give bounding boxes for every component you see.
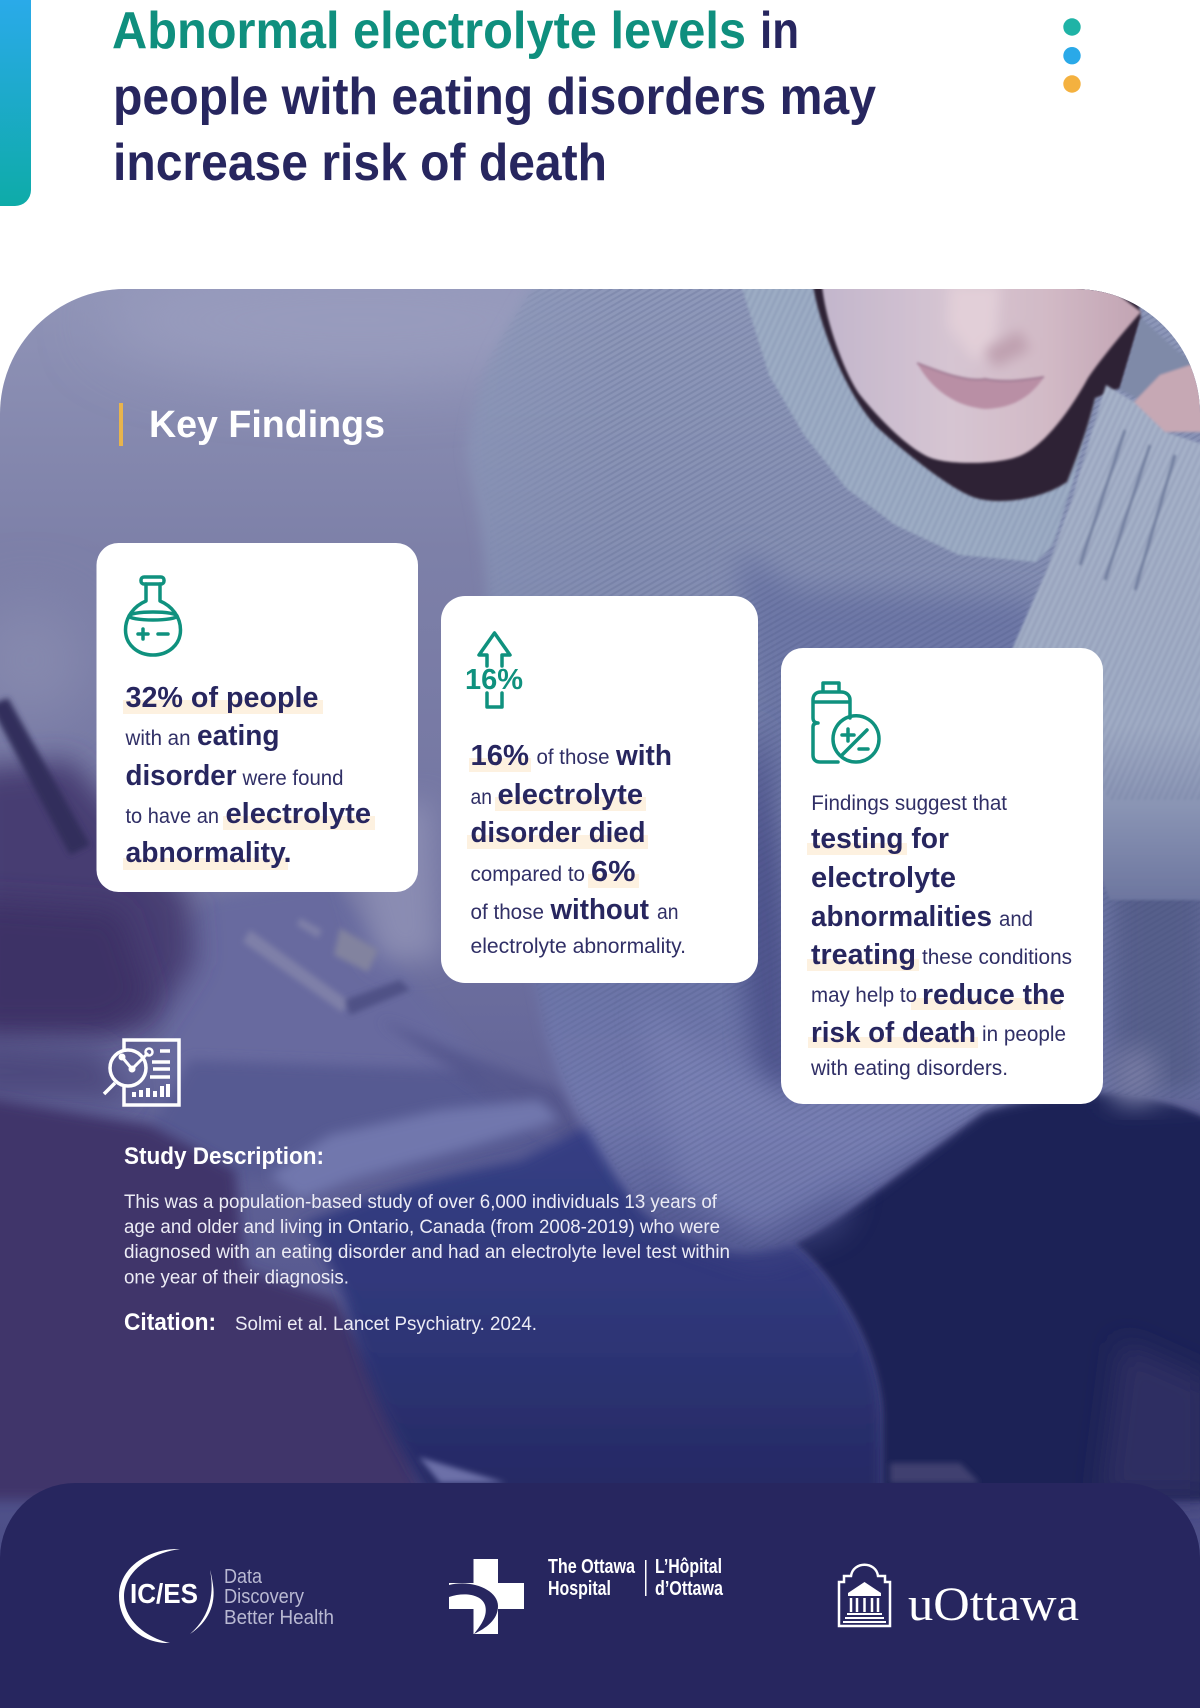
title: Abnormal electrolyte levels — [112, 2, 746, 60]
dark inner collar — [813, 285, 1141, 501]
logo: The Ottawa Hospital: d’Ottawa — [655, 1578, 724, 1600]
logo: IC/ES: Discovery — [224, 1586, 304, 1608]
text: recommendation: abnormalities — [811, 901, 992, 933]
text: citation: Solmi et al. Lancet Psychiatry. 2024. — [235, 1314, 537, 1335]
decorative three dots — [1063, 18, 1081, 93]
collar ribbing — [742, 289, 1092, 562]
face — [822, 285, 1141, 463]
logo: The Ottawa Hospital: The Ottawa — [548, 1556, 636, 1578]
title — [112, 2, 876, 192]
logo: The Ottawa Hospital: Hospital — [548, 1578, 611, 1600]
text: recommendation: with eating disorders. — [810, 1057, 1008, 1080]
logo: IC/ES: Better Health — [224, 1607, 334, 1629]
text: 32% finding — [123, 682, 375, 870]
title: in — [760, 2, 799, 60]
panel: card 32% of people — [96, 543, 418, 892]
text: mortality comparison: compared to — [470, 863, 585, 886]
text: recommendation: and — [999, 908, 1033, 931]
text: mortality comparison: electrolyte abnormality. — [470, 935, 686, 958]
title: increase risk of death — [113, 134, 607, 192]
pen — [0, 698, 90, 855]
logo: The Ottawa Hospital: L’Hôpital — [655, 1556, 722, 1578]
logo: uOttawa: uOttawa — [908, 1578, 1079, 1631]
text: recommendation: electrolyte — [811, 862, 956, 894]
logo: IC/ES: IC/ES — [130, 1578, 198, 1609]
text: recommendation: testing for — [811, 823, 949, 855]
text: 32% finding: with an — [125, 727, 190, 750]
logo: uOttawa — [839, 1565, 1079, 1631]
text: mortality comparison: with — [615, 740, 672, 772]
text: recommendation: in people — [982, 1023, 1066, 1046]
title: people with eating disorders may — [113, 68, 876, 126]
sweater body — [467, 280, 1200, 1260]
panel: card testing and treating — [781, 648, 1103, 1104]
clipboard bars — [243, 930, 350, 1012]
text: 32% finding: were found — [242, 767, 344, 790]
text: citation: Citation: — [124, 1309, 216, 1336]
text: mortality comparison: of those — [536, 746, 610, 769]
text: mortality comparison: an — [657, 901, 678, 924]
text: study description: diagnosed with an eating disorder and had an electrolyte level test within — [124, 1242, 730, 1263]
icon: report with magnifier — [104, 1040, 179, 1105]
text: study description: This was a population-based study of over 6,000 individuals 13 years of — [124, 1192, 718, 1213]
text: mortality comparison: 16% — [470, 740, 529, 772]
text: recommendation: may help to — [811, 984, 917, 1007]
text: 32% finding: abnormality. — [126, 837, 292, 869]
text: mortality comparison: 6% — [591, 856, 636, 888]
icon: bottle with plus minus circle — [813, 683, 879, 762]
text: recommendation: reduce the — [922, 979, 1065, 1011]
text: study description — [124, 1143, 730, 1288]
jeans — [300, 1091, 1200, 1500]
text: study description: age and older and living in Ontario, Canada (from 2008-2019) who were — [124, 1217, 720, 1238]
text: study description: one year of their diagnosis. — [124, 1268, 349, 1288]
right cuff, sleeve and hand — [1011, 318, 1200, 900]
logo: The Ottawa Hospital — [449, 1556, 724, 1634]
text: study description: Study Description: — [124, 1143, 324, 1170]
panel: footer band — [0, 1483, 1200, 1708]
decorative gradient tab — [0, 0, 31, 206]
icon: up arrow with 16%: 16% — [465, 664, 523, 696]
dark hand at left — [0, 760, 195, 1040]
text: mortality comparison: disorder died — [470, 817, 646, 849]
text: citation — [124, 1309, 537, 1336]
text: 32% finding: to have an — [126, 805, 219, 828]
text: mortality comparison: an — [470, 786, 492, 809]
text: recommendation: treating — [811, 939, 916, 971]
text: mortality comparison — [467, 740, 686, 958]
text: 32% finding: disorder — [126, 760, 236, 792]
lips — [917, 363, 1044, 409]
icon: up arrow with 16% — [465, 633, 523, 707]
text: mortality comparison: electrolyte — [498, 779, 643, 811]
light band under clipboard — [270, 1100, 560, 1200]
panel: card 16% vs 6% — [441, 596, 758, 983]
text: recommendation: Findings suggest that — [811, 792, 1007, 815]
panel: background photo of person in sweater — [0, 260, 1200, 1600]
text: mortality comparison: without — [550, 894, 649, 926]
logo: IC/ES: Data — [224, 1566, 263, 1588]
text: recommendation: these conditions — [922, 946, 1072, 969]
logo: IC/ES — [119, 1549, 334, 1643]
heading: Key Findings: Key Findings — [149, 404, 385, 446]
blurred clipboard and hand behind study text — [0, 698, 600, 1500]
text: mortality comparison: of those — [470, 901, 544, 924]
text: recommendation: risk of death — [811, 1017, 976, 1049]
text: 32% finding: eating — [197, 720, 280, 752]
icon: flask with plus and minus — [126, 577, 180, 655]
text: 32% finding: 32% of people — [126, 682, 318, 714]
text: 32% finding: electrolyte — [226, 798, 371, 830]
text: recommendation — [807, 792, 1072, 1080]
